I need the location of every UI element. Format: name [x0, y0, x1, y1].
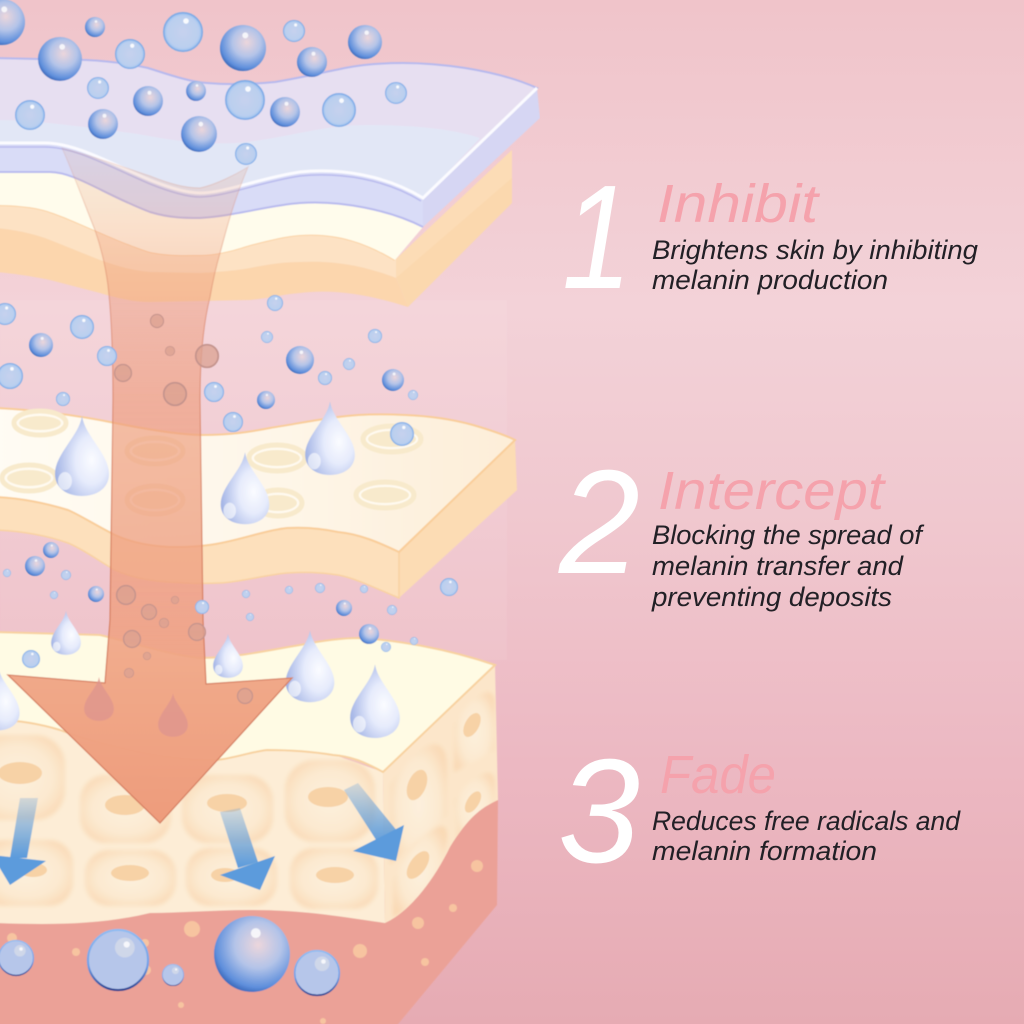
middle sheet top surface — [0, 408, 515, 552]
description 2: melanin transfer and — [652, 551, 904, 581]
middle sheet front face — [0, 497, 399, 598]
description 2: preventing deposits — [651, 582, 892, 612]
description 1: Brightens skin by inhibiting — [652, 235, 978, 265]
blue arrow centre — [220, 808, 275, 890]
small blue arrows — [0, 783, 404, 890]
epidermis right face — [383, 665, 498, 923]
blue arrow left — [0, 798, 46, 885]
description 3: melanin formation — [652, 836, 877, 866]
droplets above arrow — [0, 401, 400, 738]
step 3: fade — [558, 729, 961, 894]
lavender line under white edge — [0, 147, 421, 201]
large translucent orange arrow — [8, 148, 292, 823]
heading intercept: Intercept — [658, 461, 886, 521]
epidermis top surface — [0, 632, 495, 772]
light peach band — [0, 100, 396, 278]
epidermis cells — [0, 692, 495, 918]
translucent skin block backdrop — [0, 300, 507, 660]
description 1: melanin production — [652, 265, 888, 295]
peach right face — [395, 150, 512, 307]
skin layer: lavender stratum — [0, 58, 540, 227]
skin layer: bottom dermis block — [0, 632, 498, 1024]
lavender front face — [0, 100, 423, 227]
lavender lower edge — [0, 172, 423, 227]
water bubbles — [0, 0, 458, 995]
dermis yellow specks — [7, 860, 483, 1024]
dermis pink base — [0, 795, 498, 1024]
lower bubbles — [3, 542, 458, 704]
step 2: intercept — [558, 440, 925, 612]
lavender right face — [423, 88, 540, 227]
cell bodies — [0, 692, 495, 918]
number 3: 3 — [558, 729, 640, 894]
step 1: inhibit — [562, 155, 978, 320]
skin illustration — [0, 0, 540, 1024]
middle sheet cell rings — [6, 415, 417, 512]
epidermis front face — [0, 700, 385, 924]
peach band — [0, 100, 408, 307]
band separator — [0, 205, 395, 260]
lavender front white edge — [0, 88, 537, 198]
cream band — [0, 100, 423, 260]
blue arrow right — [344, 783, 404, 861]
bottom large bubbles — [0, 916, 339, 995]
skin layer: top peach and cream bands — [0, 100, 512, 307]
skin layer: middle wavy sheet — [0, 408, 517, 598]
description 2: Blocking the spread of — [652, 520, 925, 550]
melanin droplets inside arrow — [84, 677, 188, 737]
number 1: 1 — [562, 155, 632, 320]
middle sheet right face — [399, 440, 517, 598]
middle bubbles — [0, 295, 418, 446]
heading inhibit: Inhibit — [657, 174, 820, 234]
description 3: Reduces free radicals and — [652, 806, 961, 836]
heading fade: Fade — [660, 745, 776, 805]
lavender top surface — [0, 58, 537, 198]
lavender inner sheen — [0, 120, 480, 198]
top bubbles — [0, 0, 407, 165]
cell nuclei — [0, 710, 484, 883]
number 2: 2 — [558, 440, 640, 605]
